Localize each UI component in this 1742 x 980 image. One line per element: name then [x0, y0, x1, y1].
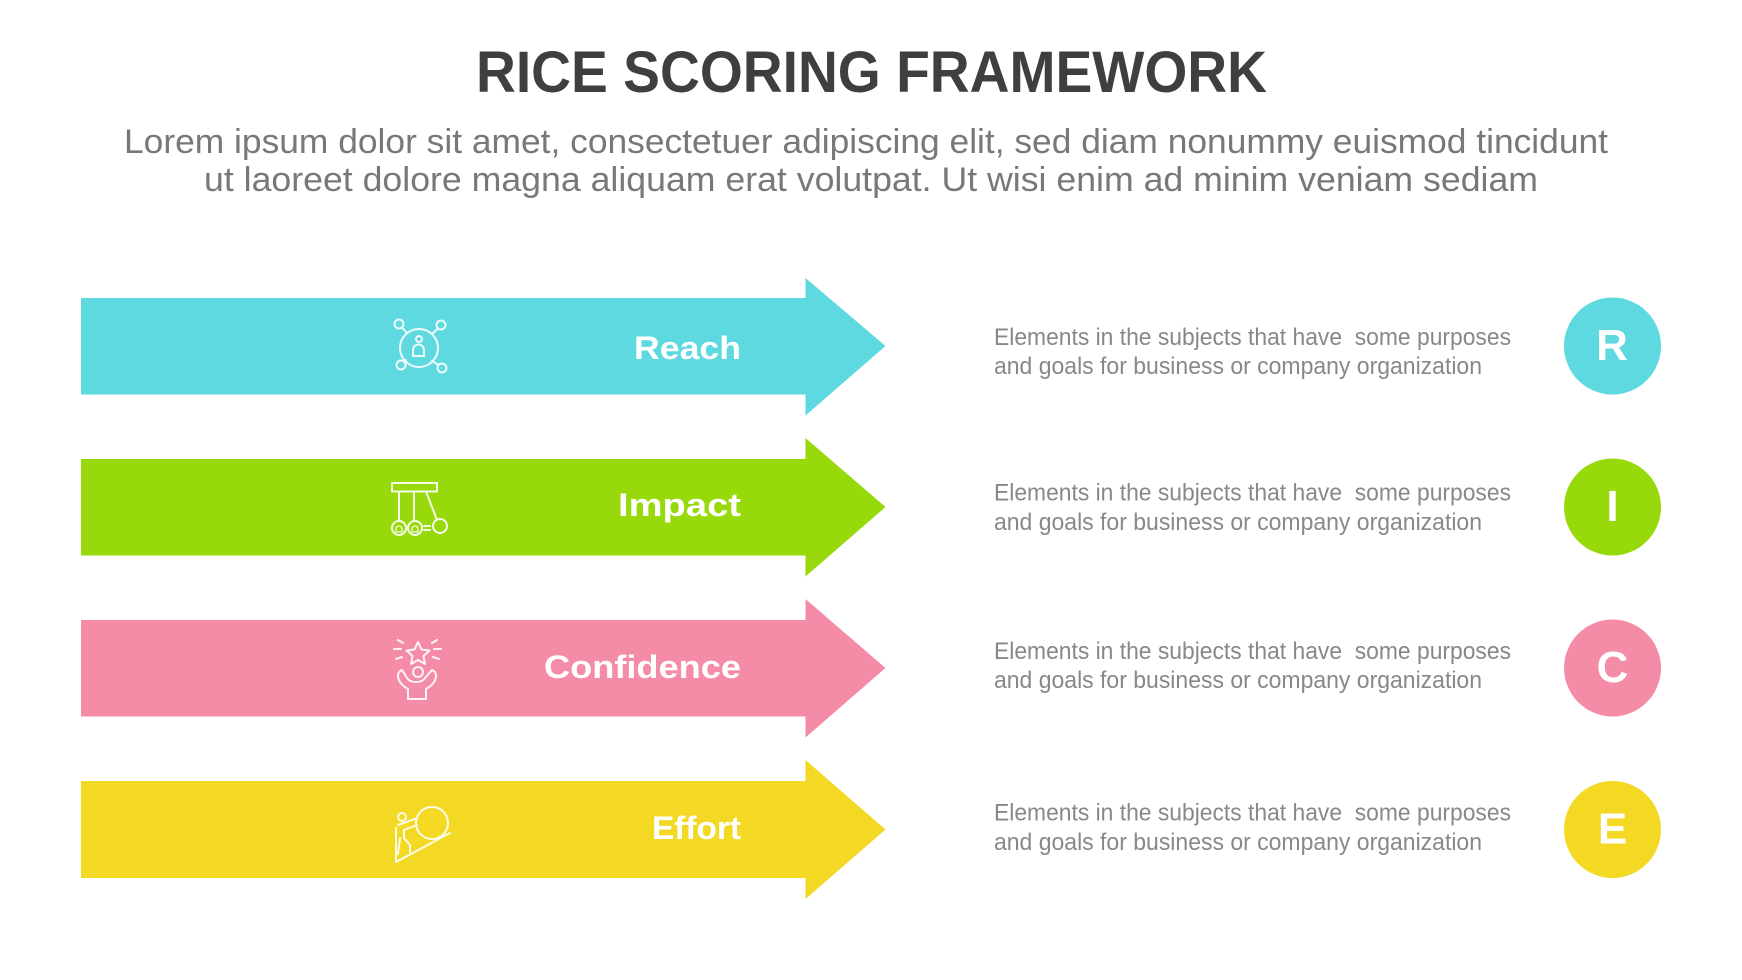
icon: person pushing boulder — [396, 807, 450, 862]
row: Confidence — [81, 599, 1661, 738]
badge: C: C — [1597, 643, 1628, 692]
row: Impact — [81, 438, 1661, 576]
description: Reach — [994, 324, 1511, 380]
arrow: Reach — [81, 278, 886, 416]
subtitle text: ut laoreet dolore magna aliquam erat volutpat. Ut wisi enim ad minim veniam sediam — [204, 161, 1538, 199]
label: Confidence: Confidence — [544, 649, 741, 685]
row: Reach — [81, 278, 1661, 416]
description: Confidence: and goals for business or company organization — [994, 667, 1482, 694]
badge: I: I — [1606, 482, 1619, 531]
label: Reach: Reach — [634, 330, 741, 366]
description: Reach: Elements in the subjects that have some purposes — [994, 324, 1511, 351]
icon: newton cradle — [392, 483, 447, 535]
icon: network person — [394, 320, 446, 372]
description: Effort: and goals for business or company organization — [994, 829, 1482, 856]
description: Confidence: Elements in the subjects that have some purposes — [994, 638, 1511, 665]
description: Effort: Elements in the subjects that have some purposes — [994, 800, 1511, 826]
subtitle text — [124, 123, 1609, 199]
title: RICE SCORING FRAMEWORK — [476, 40, 1267, 105]
arrow: Effort — [81, 760, 886, 899]
label: Effort: Effort — [652, 810, 741, 846]
badge: E: E — [1598, 804, 1627, 854]
description: Reach: and goals for business or company organization — [994, 353, 1482, 380]
description: Confidence — [994, 638, 1511, 694]
description: Effort — [994, 800, 1511, 856]
badge: R — [1564, 298, 1661, 394]
badge: R: R — [1596, 321, 1628, 370]
description: Impact: and goals for business or company organization — [994, 509, 1482, 536]
badge: I — [1564, 458, 1661, 556]
description: Impact — [994, 480, 1511, 536]
icon: star and raised hands — [394, 640, 441, 699]
description: Impact: Elements in the subjects that have some purposes — [994, 480, 1511, 506]
badge: C — [1564, 620, 1661, 716]
badge: E — [1564, 781, 1661, 878]
row: Effort — [81, 760, 1661, 899]
label: Impact: Impact — [618, 487, 741, 523]
arrow: Confidence — [81, 599, 886, 738]
arrow: Impact — [81, 438, 886, 576]
subtitle text: Lorem ipsum dolor sit amet, consectetuer adipiscing elit, sed diam nonummy euismod tincidunt — [124, 123, 1609, 161]
